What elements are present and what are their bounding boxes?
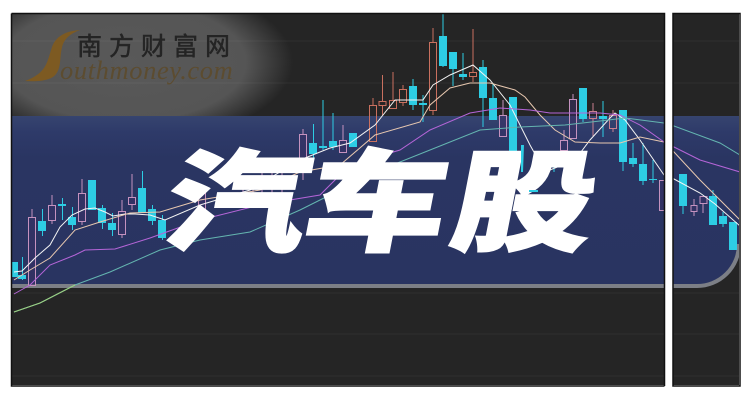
rounded band rule [673, 244, 739, 286]
candlesticks and moving averages [12, 14, 664, 312]
title [155, 143, 607, 265]
logo glow [12, 14, 312, 116]
blue band [12, 116, 664, 284]
logo Chinese name: 南方财富网 [77, 27, 237, 63]
right panel candlesticks and averages [674, 125, 739, 250]
icon: S swoosh [25, 30, 80, 81]
logo: southmoney [25, 27, 237, 85]
title character 2: 车 [295, 143, 460, 265]
band bottom rule [12, 284, 664, 288]
logo domain: outhmoney.com [60, 55, 233, 85]
title character 3: 股 [442, 143, 607, 265]
cyan candle overlap on title [521, 145, 538, 192]
right blue band with rounded corner [673, 116, 739, 286]
title character 1: 汽 [155, 143, 320, 265]
right chart panel [674, 14, 739, 385]
